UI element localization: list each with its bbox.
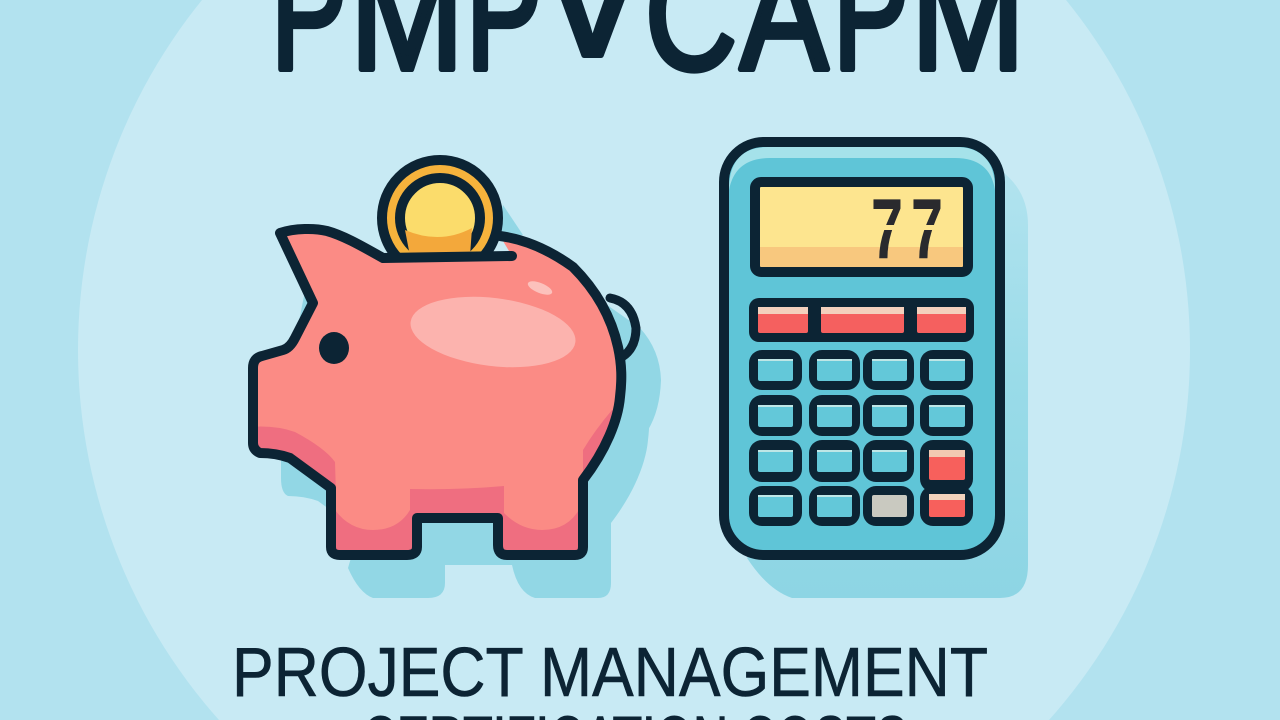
coin [382, 160, 498, 276]
subtitle: PROJECT MANAGEMENT [232, 633, 988, 711]
screen digits: 7 [871, 182, 903, 277]
calculator screen [755, 182, 968, 277]
pig eye [319, 332, 349, 364]
equals key grey [872, 495, 907, 517]
title [271, 0, 1025, 103]
pig body [253, 229, 621, 555]
icon: piggy bank [250, 160, 661, 598]
pig tail [610, 298, 636, 357]
pig highlight [406, 288, 580, 376]
pig shading [258, 410, 612, 550]
red key small [929, 494, 965, 517]
function keys [749, 298, 974, 342]
pig small highlight [526, 278, 554, 298]
red key tall [929, 450, 965, 480]
pig outline [253, 229, 621, 555]
calculator outline [724, 142, 1000, 555]
icon: calculator [724, 142, 1028, 598]
calculator body [724, 142, 1000, 555]
calculator top highlight [729, 147, 995, 190]
screen digits [871, 182, 944, 277]
pig shadow [281, 205, 661, 598]
keypad [749, 350, 973, 526]
calculator shadow [747, 170, 1028, 598]
screen digits: 7 [911, 182, 943, 277]
